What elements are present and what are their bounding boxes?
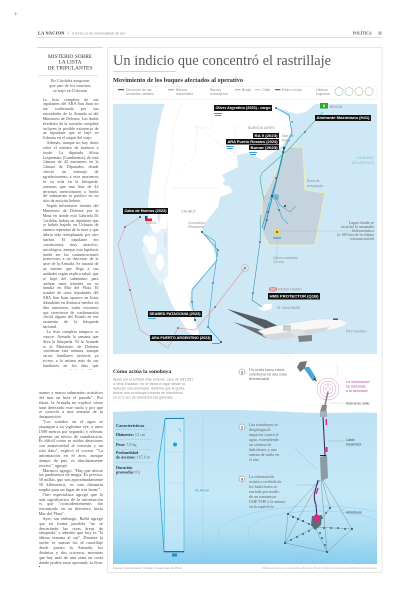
marker: hydroacoustic anomaly: [273, 229, 281, 238]
text: place labels: Plata: [282, 138, 290, 142]
step 3: los hidrófonos es: [249, 484, 277, 489]
text block: article lower column: "Los sonidos en el agua se propagan a su vigésima vez, a unos 1500 metros por segundo, y refinan, generan un efecto de canalización. Es difícil como es ruidos detectores con anterioridad al travesía y un solo dato", explicó el vocero. "La información en el área, aunque tiempo de paz, es absolutamente secreto", agregó.: [38, 419, 103, 468]
characteristics list: [116, 423, 153, 474]
radio signal circles: [317, 378, 339, 400]
ship labels: SEABED PATAGONIA (2023): [150, 312, 200, 316]
step 2: un sistema de: [249, 442, 271, 447]
legend: Dirección de las: [126, 88, 152, 92]
legend: Barcos: [210, 88, 221, 92]
step 1: 1: [241, 370, 244, 374]
ship labels: Almirante Maximiano (H41): [316, 116, 370, 120]
labels for buoy: [295, 402, 369, 514]
step 3: UHF/VHF a la antena: [249, 499, 285, 504]
ship labels: [123, 105, 371, 344]
text block: article upper column: Según informaron fuentes del Ministerio de Defensa por la Mesa en donde está Gabriela Di Córdoba, habría un tripulante que se habría bajado en Ushuaia de manera repentina de la nave y que habría sido reemplazado por otro marino. El tripulante era comisionista, muy atractivo, psicológica, aunque esta hipótesis puede ser las comunicaciones posteriores a un descenso de la nave de la Armada. Se trataría de un marino que llega a sus unidades según explica salud, que se bajó del submarino para realizar unos trámites en su familia en Mar del Plata. El nombre de otros tripulantes del ARA San Juan aparece en listas difundidas en distintos medios en días anteriores, todas versiones que carecieron de confirmación oficial alguna del Estado en ese momento de la búsqueda nacional.: [42, 203, 98, 329]
text: place labels: (a 100 km de la última: [337, 232, 374, 237]
step 2: agua, extendiendo: [249, 437, 279, 443]
text block: article lower column: Ayer, sin embargo, Balbi agregó que en forma paralela "no se descartarán las otras áreas de búsqueda" y admitió que hoy es "la última semana al sur". Durante la noche se suman los al rastrillaje desde puerto la Armada, los distintos y dos cruceros, mientras que hay más de una zona en costa donde podría estar operando la flota. ▪: [38, 516, 103, 569]
characteristics list: Profundidad: [116, 450, 139, 455]
text: place labels: Último contacto: [273, 255, 298, 260]
source credits: [113, 566, 378, 570]
text: place labels: comunicación): [350, 236, 375, 241]
step 1: [239, 367, 287, 381]
text block: intro: [113, 378, 193, 400]
labels for buoy: Antena de radio: [346, 402, 369, 406]
text: radio transmission callout: La información: [346, 380, 370, 384]
text block: article lower column: [38, 391, 103, 569]
text block: article upper column: Además, aunque no hay datos sobre el número de marinos a bordo. La diputada Silvia Lospennato (Cambiemos) de esta Cámara de 42 marineros en la Cámara de Diputados, donde ofreció un mensaje de agradecimiento a esos marineros en su vida en la búsqueda, mientras que una lista de 44 personas mencionaron a bordo del submarino se publicó en un sitio de noticias hebreo.: [42, 140, 98, 203]
left column heading: se bajó en Ushuaia: [53, 88, 87, 93]
heading: how the sonobuoy works: Cómo actúa la sonoboya: [113, 369, 171, 375]
characteristics list: de ascenso: 167,6 m: [116, 454, 151, 460]
icon: P8 Poseidon airplane: [227, 309, 347, 342]
legend: nacionales: [176, 92, 193, 96]
text: place labels: escuchó la anomalía: [341, 224, 374, 229]
step 2: impactar contra el: [249, 432, 279, 437]
text block: intro: a otros Estados, no se lanza a lugar desde la: [113, 382, 185, 386]
flags: [145, 103, 328, 292]
text block: article lower column: Otro especialista agregó que lo más significativo de la información es que "coincidentemente, fue encontrado en su derrotero hacia Mar del Plata".: [38, 492, 103, 516]
legend: Chile: [262, 88, 270, 92]
panel: infographic frame: [108, 48, 382, 572]
diagram: sonobuoy cross-section: 91,44 cm: [195, 488, 209, 492]
text: place labels: CHILE: [146, 221, 157, 225]
header: newspaper masthead: LA NACION: [38, 30, 65, 36]
ship labels: RA 9 (2023): [254, 134, 278, 138]
text block: article upper column: La lista completa de sus tripulantes del ARA San Juan no fue confirmada por sus autoridades de la Armada ni del Ministerio de Defensa. Las dudas alrededor de la cuestión completa incluyen la posible existencia de un tripulante que se bajó en Ushuaia en el origen del viaje.: [42, 98, 98, 140]
header: newspaper masthead: POLÍTICA: [353, 30, 372, 36]
text block: article upper column: [42, 98, 98, 370]
text block: article lower column: Martucci agregó: "Hay que ubicar los parámetros de magia. Es preciso, 50 millas, que son aproximadamente 50 kilómetros, es una distancia amplia para un lugar de tres horas".: [38, 468, 103, 492]
text: place labels: P8 Poseidón: [346, 330, 366, 334]
text: place labels: hidroacústica: [352, 228, 374, 233]
search area polygon: [262, 147, 325, 245]
text: place labels: [146, 105, 375, 334]
title: Un indicio que concentró el rastrillaje: [113, 53, 331, 69]
below the map: white band with airplane overlap: [113, 354, 377, 412]
text block: intro: Apelé por la unidad más potente, cara de S$1,551: [113, 378, 193, 382]
step 3: de un transmisor: [249, 494, 277, 499]
text: place labels: REINO UNIDO: [278, 288, 302, 292]
characteristics list: Características: [116, 423, 145, 428]
buoy with antenna: [320, 392, 328, 481]
left column heading: DE TRIPULANTES: [48, 66, 92, 72]
diagram: sonobuoy cross-section: [158, 418, 209, 560]
step 2: despliegan al: [249, 427, 271, 432]
header: newspaper masthead: 11: [378, 30, 382, 36]
text: place labels: Comodoro: [188, 221, 205, 225]
legend: registros: [316, 92, 330, 96]
left column heading: En Córdoba aseguran: [51, 78, 90, 83]
step 2: Las sonoboyas se: [249, 422, 278, 427]
labels for buoy: Cable: [346, 438, 355, 442]
legend: extranjeros: [210, 92, 228, 96]
step 3: en la superficie: [249, 504, 274, 509]
step 3: [239, 474, 285, 509]
labels for buoy: Hidrófonos: [346, 510, 362, 514]
step 3: La información: [249, 474, 274, 479]
text: place labels: IS. MALVINAS: [277, 306, 301, 310]
characteristics list: Diámetro: 12 cm: [116, 432, 146, 437]
step 2: [239, 422, 279, 462]
text: place labels: BUENOS AIRES: [248, 126, 275, 130]
text block: intro: detectar una anomalía. Sistema que le gusta: [113, 386, 184, 390]
legend: Barcos: [176, 88, 187, 92]
legend: Últimos: [316, 87, 328, 92]
text: place labels: CHUBUT: [181, 210, 197, 214]
text: place labels: Mar del: [282, 134, 294, 138]
source credits: Última lanzamiento de la tabla afirmaba. Mucho https://sonoboya.ar/militar/sonar/operativo: [262, 567, 378, 570]
ship labels: Cabo de Hornos (2023): [124, 209, 166, 213]
step 2: hidrófonos y una: [249, 447, 277, 452]
icon: falling sonobuoy with parachute: [297, 361, 317, 381]
legend: [113, 86, 377, 100]
step 3: acústica recibida de: [249, 479, 281, 484]
legend: Brasil: [242, 88, 251, 92]
text: place labels: Rivadavia: [188, 225, 204, 229]
step 2: 2: [241, 424, 244, 430]
text block: intro: lanzar una sonoboya a través de hidrófonos: [113, 391, 183, 395]
Malvinas islands: [258, 304, 272, 311]
text block: intro: en el 3 uso de radiotrans las gaviotas.: [113, 396, 174, 400]
text: place labels: OCÉANO: [357, 155, 374, 160]
step 1: Un avión lanza varias: [249, 367, 285, 372]
header: newspaper masthead: JUEVES 23 DE NOVIEMBRE DE 2017: [72, 32, 127, 36]
text: place labels: Área de: [307, 179, 320, 183]
step 3: enviada por medio: [249, 489, 279, 494]
step 1: sonoboyas en una zona: [249, 372, 287, 376]
left column heading: [37, 47, 103, 93]
header: newspaper masthead: [14, 12, 382, 38]
step 1: determinada.: [249, 376, 270, 381]
text: place labels: BRASIL: [330, 105, 343, 109]
legend: unidades navales: [126, 92, 154, 96]
ship labels: Bumar (2023): [250, 146, 278, 150]
text: radio transmission callout: se transmite: [346, 384, 366, 388]
land: Argentina and Chile: [148, 104, 315, 338]
step 2: antena de radio en: [249, 452, 279, 457]
text: place labels: Lugar donde se: [349, 220, 374, 225]
text: place labels: ATLÁNTICO: [352, 160, 374, 165]
map: South Atlantic search area: [113, 103, 377, 354]
heading: movement of ships: Movimiento de los buques afectados al operativo: [113, 77, 243, 84]
ship labels: ARA PUERTO ARGENTINO (2023): [152, 336, 210, 340]
step 2: el aire: [249, 457, 259, 462]
left column heading: LA LISTA: [58, 60, 82, 66]
characteristics list: Duración: [116, 465, 133, 470]
header: newspaper masthead: +: [14, 12, 18, 18]
borders: [165, 104, 238, 228]
hydrophone array: [284, 480, 353, 553]
left column heading: que uno de los marinos: [49, 83, 91, 88]
text: place labels: búsqueda: [307, 184, 323, 188]
ship labels: ARA Puerto Rosales (2023): [228, 140, 278, 144]
labels for buoy: transmisor: [346, 442, 362, 446]
step 3: 3: [241, 476, 244, 482]
routes: ships: [118, 108, 365, 348]
source credits: Fuente: Fuerza Naval / Infobae / Cuadernas / E-Prints: [113, 566, 183, 570]
ship labels: Oliver Argentino (2023) - cargo: [216, 106, 270, 110]
characteristics list: Peso: 7,9 kg: [116, 442, 137, 448]
ship labels: HMS PROTECTOR (Q1B): [270, 295, 318, 299]
characteristics list: promedio: 8 h: [116, 470, 140, 474]
left column heading: MISTERIO SOBRE: [48, 54, 93, 60]
sonar ellipses: [218, 506, 377, 564]
text: radio transmission callout: [346, 380, 370, 393]
text: place labels: 15-nov: [273, 260, 284, 264]
text: radio transmission callout: a la aeronave: [346, 389, 368, 393]
legend: Reino Unido: [282, 88, 302, 92]
